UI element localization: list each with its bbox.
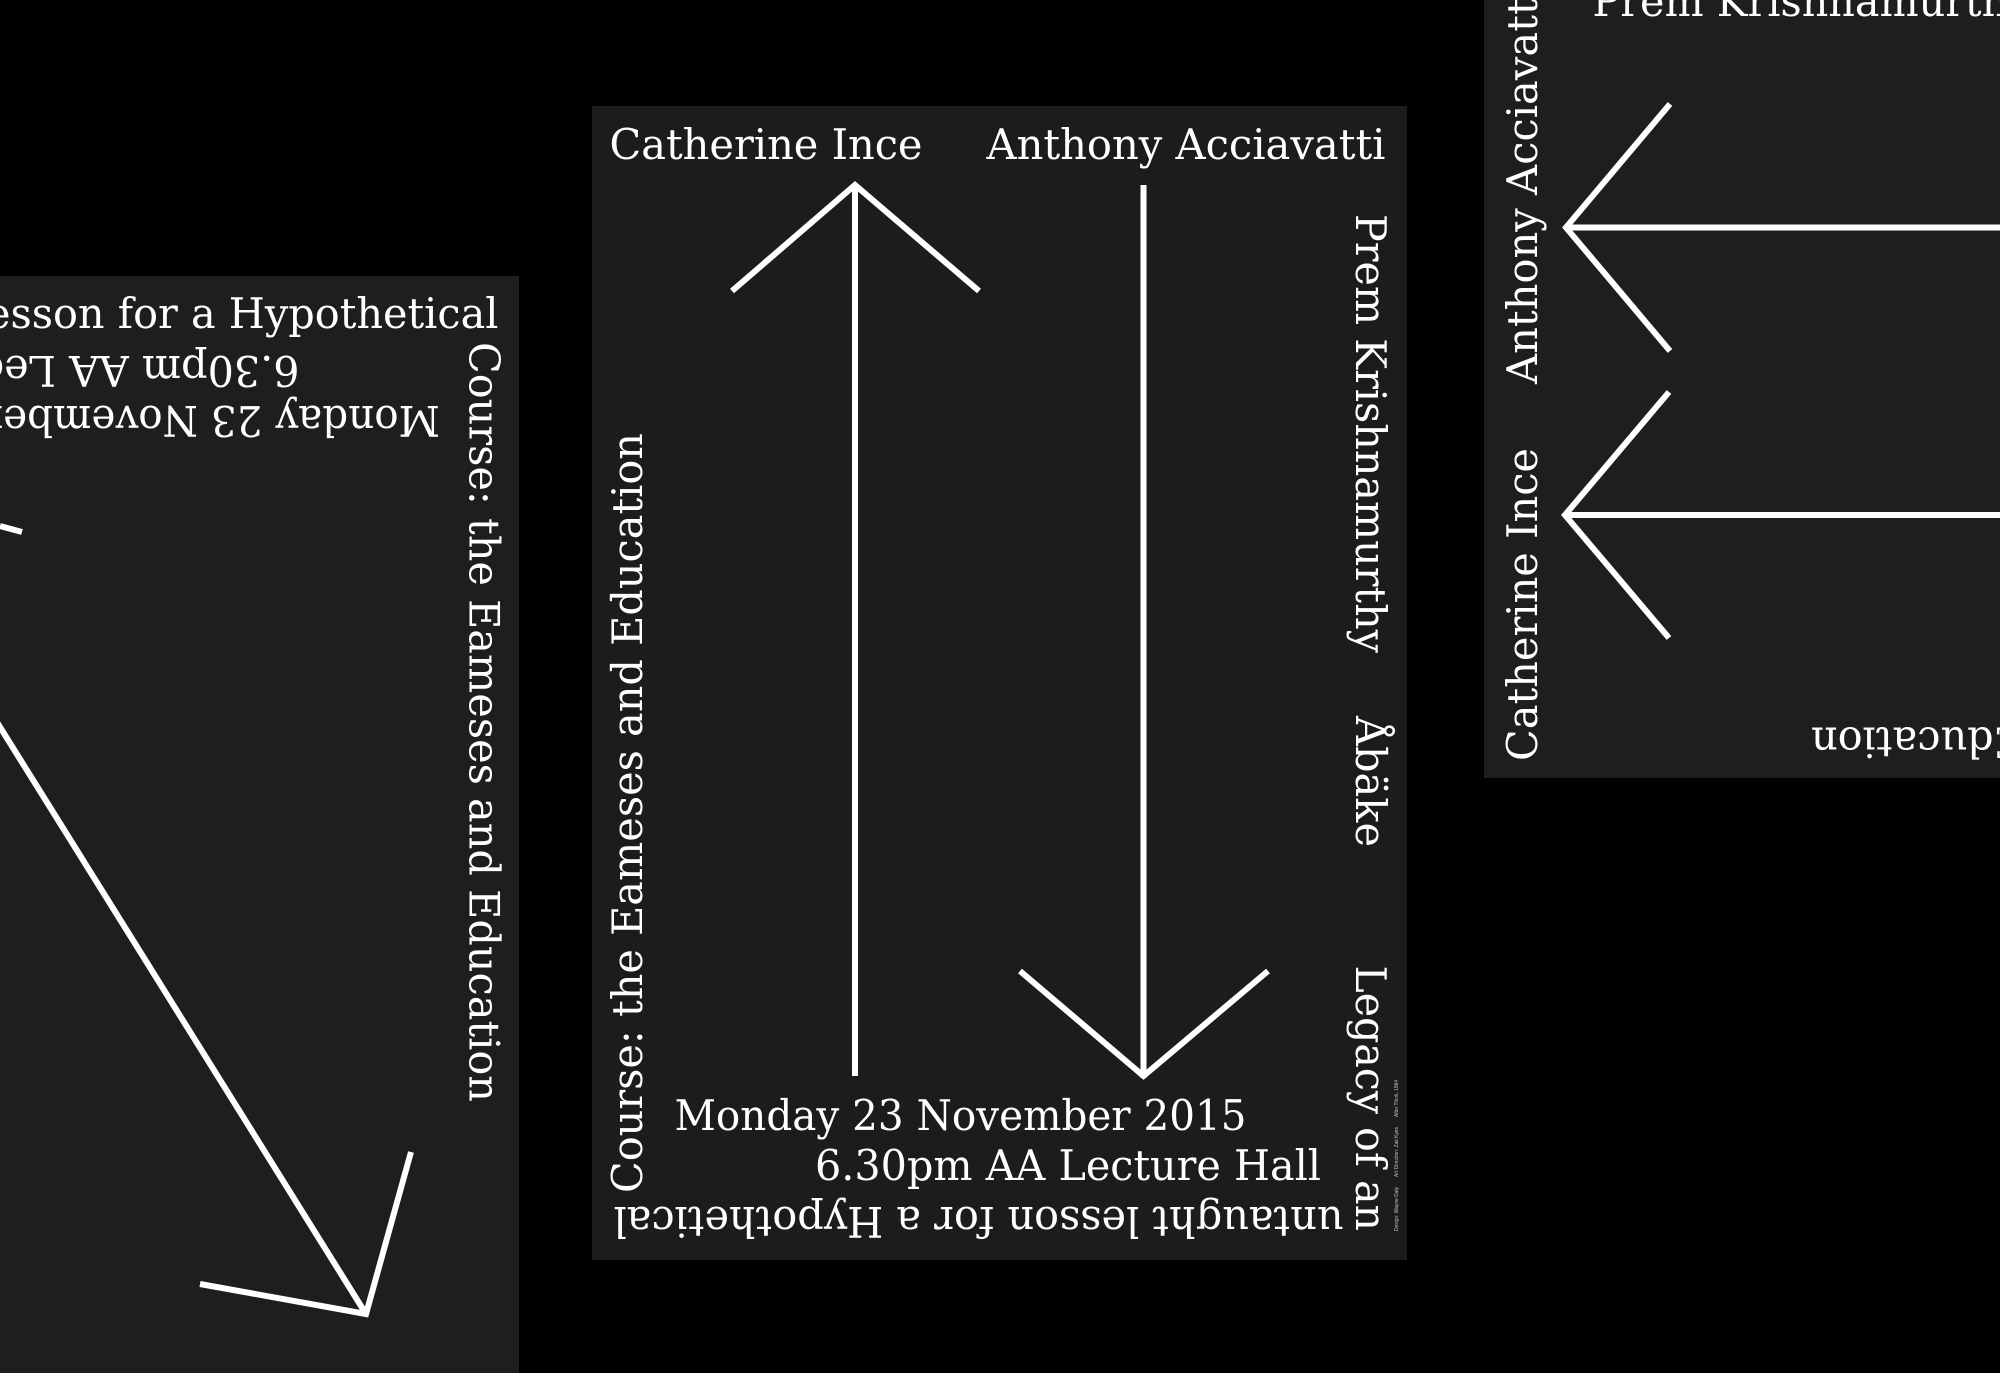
arrow: down — [1020, 185, 1268, 1078]
left poster background — [0, 276, 519, 1373]
credit: design: Design: Wayne Daly — [1394, 1187, 1400, 1231]
credit: after think: After Think, 1964 — [1394, 1079, 1400, 1117]
panel: left poster, rotated 180 degrees — [0, 276, 519, 1373]
left poster arrow fragment — [0, 526, 22, 532]
speaker: Prem Krishnamurthy: Prem Krishnamurthy — [1346, 214, 1395, 653]
panel: right poster, rotated 90 degrees anticlockwise — [1484, 0, 2000, 778]
right poster background — [1484, 0, 2000, 778]
left poster diagonal arrow — [0, 719, 411, 1314]
credit: art direction: Art Direction: Zak Kyes — [1394, 1127, 1400, 1177]
centre poster background — [592, 106, 1407, 1260]
speaker: Anthony Acciavatti: Anthony Acciavatti — [986, 120, 1386, 169]
time and venue: 6.30pm AA Lecture Hall — [815, 1141, 1321, 1190]
right poster speaker: Catherine Ince: Catherine Ince — [1498, 448, 1547, 761]
speaker: Catherine Ince: Catherine Ince — [610, 120, 922, 169]
arrow: up — [732, 185, 979, 1076]
panel: centre poster — [592, 106, 1407, 1260]
title line: untaught lesson: untaught lesson for a Hypothetical — [614, 1197, 1344, 1246]
date: Monday 23 November 2015 — [674, 1091, 1246, 1140]
title start: Legacy of an: Legacy of an — [1346, 966, 1395, 1231]
right poster arrow: upper — [1566, 104, 2000, 351]
right poster arrow: lower — [1565, 392, 2000, 638]
course title: Course: the Eameses and Education — [603, 433, 652, 1193]
left poster course title: Course: the Eameses and Education — [460, 342, 508, 1102]
speaker: Åbäke: Åbäke — [1346, 715, 1396, 847]
